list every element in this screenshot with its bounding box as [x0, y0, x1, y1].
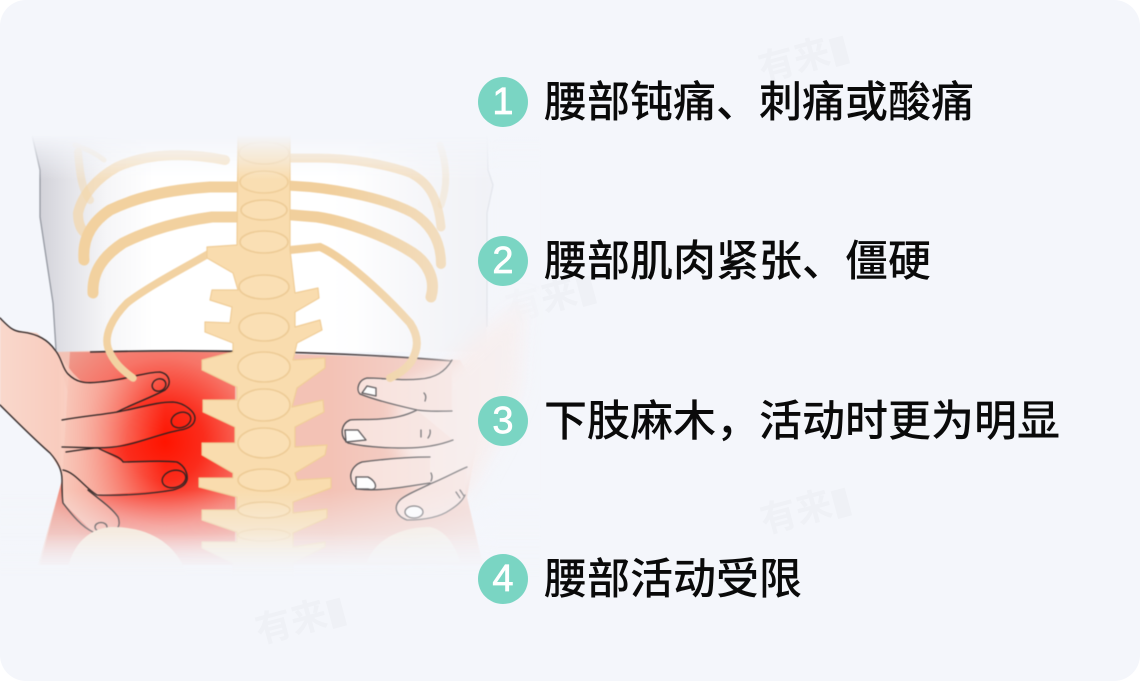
symptom 2: [478, 236, 931, 286]
symptom 1: [478, 77, 974, 127]
left ribs: [75, 145, 240, 378]
number 1: 1: [492, 81, 514, 123]
number 2: [478, 236, 528, 286]
right hand: [342, 360, 467, 520]
bottom fade: [38, 494, 482, 574]
lower back with red pain area: [38, 351, 485, 565]
torso: [32, 135, 493, 352]
symptom 4: [478, 554, 802, 604]
pelvis bones: [72, 526, 448, 558]
watermark middle: 有来▮: [501, 266, 600, 329]
label 3: 下肢麻木，活动时更为明显: [544, 398, 1060, 446]
number 1: [478, 77, 528, 127]
label 1: 腰部钝痛、刺痛或酸痛: [544, 79, 974, 127]
label 2: 腰部肌肉紧张、僵硬: [544, 238, 931, 286]
number 2: 2: [492, 240, 514, 282]
illustration: lower back pain anatomy: [0, 139, 516, 562]
watermark lower: 有来▮: [756, 478, 855, 541]
number 4: [478, 554, 528, 604]
right wrist glow: [391, 321, 516, 494]
spine: [199, 135, 331, 578]
number 3: [478, 396, 528, 446]
left hand: [0, 318, 195, 532]
watermark top: 有来▮: [754, 26, 853, 89]
symptom 3: [478, 396, 1060, 446]
number 4: 4: [492, 558, 514, 600]
label 4: 腰部活动受限: [544, 556, 802, 604]
right side fade: [345, 158, 524, 548]
number 3: 3: [492, 400, 514, 442]
right ribs: [280, 145, 446, 378]
watermark bottom: 有来▮: [251, 588, 350, 651]
